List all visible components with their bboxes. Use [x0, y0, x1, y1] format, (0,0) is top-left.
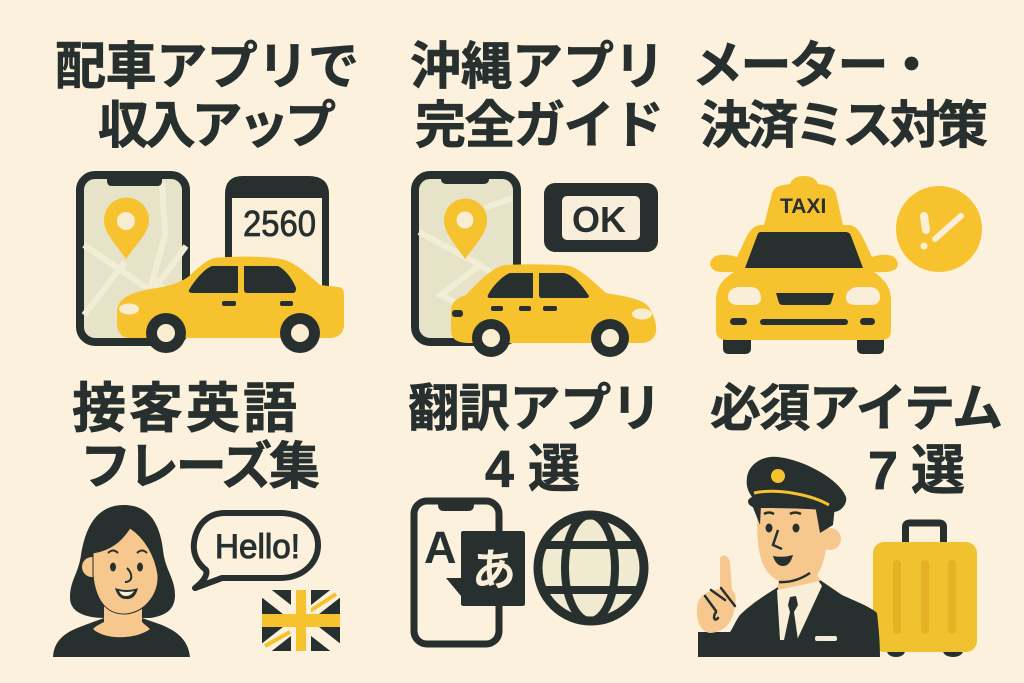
icon: translation phone — [414, 500, 525, 644]
heading: 配車アプリで収入アップ: 配車アプリで — [55, 38, 359, 95]
icon: translation phone: あ — [472, 534, 516, 598]
icon: speech bubble: Hello! — [215, 528, 300, 566]
illustration: ride-hailing phones and taxi — [80, 175, 344, 353]
uniform — [698, 580, 880, 657]
icon: fare phone: 2560 — [243, 203, 316, 244]
icon: alert badge — [896, 186, 982, 272]
illustration: front view taxi with alert — [710, 176, 982, 354]
heading: メーター・決済ミス対策 — [692, 37, 988, 154]
cap — [747, 457, 846, 512]
heading: 沖縄アプリ完全ガイド — [410, 38, 665, 154]
icon: yellow taxi side view — [117, 257, 344, 353]
heading: 接客英語フレーズ集: フレーズ集 — [80, 438, 320, 495]
heading: 必須アイテム7選: 必須アイテム — [710, 380, 1003, 437]
icon: speech bubble — [194, 513, 318, 588]
heading: 翻訳アプリ4選: 4選 — [485, 441, 580, 499]
head — [819, 528, 841, 550]
illustration: driver and suitcase — [697, 457, 977, 657]
icon: translation phone: A — [424, 522, 456, 573]
icon: OK sign — [544, 183, 658, 252]
icon: yellow taxi side view — [451, 264, 656, 357]
heading: 接客英語フレーズ集 — [72, 379, 320, 495]
icon: driver — [697, 457, 880, 657]
heading: 必須アイテム7選: 7選 — [868, 441, 965, 501]
icon: suitcase — [873, 523, 977, 657]
heading: 沖縄アプリ完全ガイド: 沖縄アプリ — [410, 38, 665, 95]
heading: 接客英語フレーズ集: 接客英語 — [72, 379, 297, 439]
icon: taxi front view — [710, 176, 898, 354]
heading: 沖縄アプリ完全ガイド: 完全ガイド — [415, 97, 664, 154]
illustration: Okinawa app phone, OK sign and taxi — [415, 175, 658, 357]
illustration: English phrases — [53, 505, 340, 657]
heading: メーター・決済ミス対策: メーター・ — [692, 37, 937, 94]
icon: UK flag — [262, 590, 340, 651]
illustration: translation apps — [414, 500, 644, 644]
icon: map phone — [80, 175, 186, 342]
icon: map phone — [415, 175, 517, 342]
heading: 配車アプリで収入アップ — [55, 38, 359, 154]
icon: fare phone — [225, 176, 329, 320]
hand — [697, 555, 736, 633]
icon: OK sign: OK — [572, 199, 626, 240]
heading: 翻訳アプリ4選: 翻訳アプリ — [408, 380, 662, 437]
heading: 配車アプリで収入アップ: 収入アップ — [98, 97, 336, 154]
icon: globe — [538, 515, 644, 621]
icon: woman — [53, 505, 190, 657]
heading: メーター・決済ミス対策: 決済ミス対策 — [700, 97, 988, 154]
icon: taxi front view: TAXI — [780, 195, 826, 218]
neck — [778, 570, 820, 590]
heading: 必須アイテム7選 — [710, 380, 1003, 501]
heading: 翻訳アプリ4選 — [408, 380, 662, 499]
